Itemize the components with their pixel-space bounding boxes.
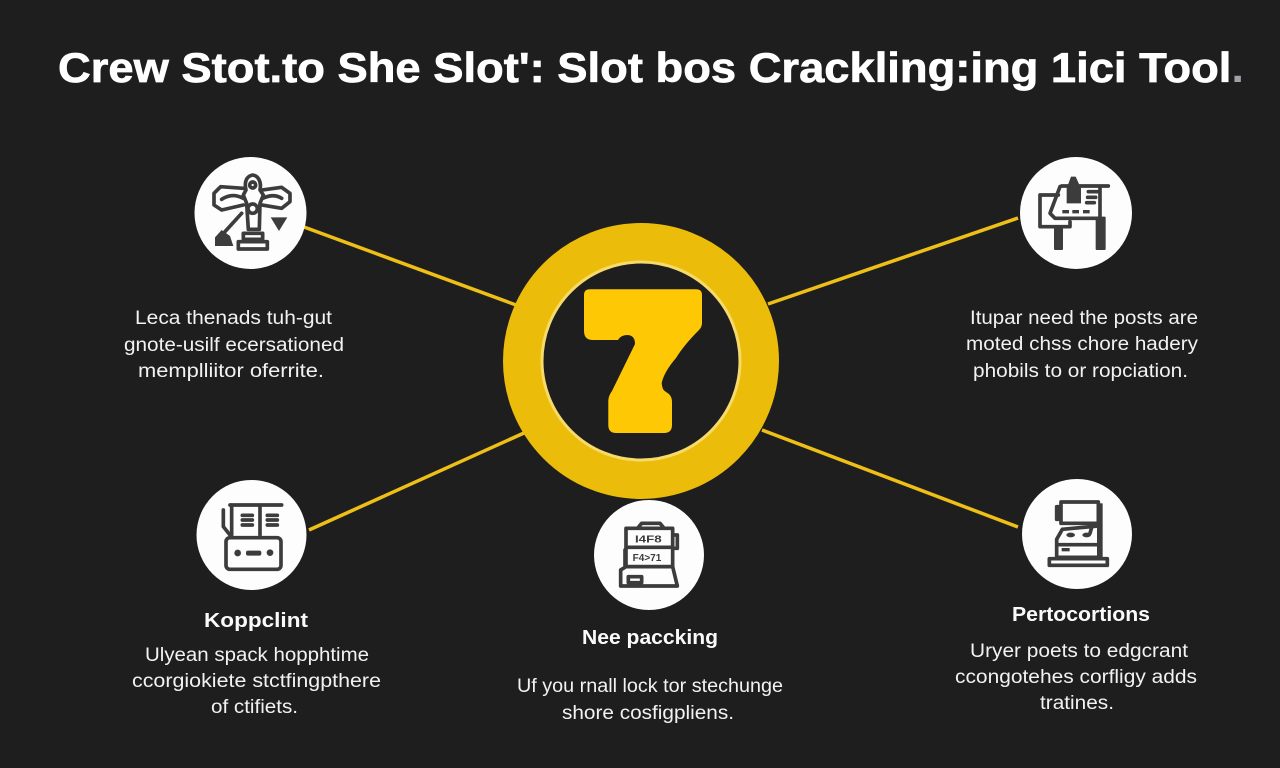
text: bottom-right block <box>955 604 1197 714</box>
title: Crew Stot.to She Slot': Slot bos Crackling:ing 1ici Tool . <box>58 44 1244 91</box>
icon: top-right workstation <box>1020 157 1132 269</box>
description: Uryer poets to edgcrant <box>970 641 1189 662</box>
description: tratines. <box>1040 693 1114 714</box>
text: top-left description: Leca thenads tuh-gut <box>135 308 333 329</box>
text: top-left description <box>124 308 344 382</box>
heading: Pertocortions: Pertocortions <box>1012 604 1150 626</box>
text: top-left description: gnote-usilf ecersationed <box>124 335 344 356</box>
icon: seven <box>584 289 702 433</box>
icon: bottom-centre slot machine: I4F8 <box>635 535 662 546</box>
icon: bottom-centre slot machine: F4>71 <box>633 553 662 564</box>
connector lines <box>304 218 1018 530</box>
description: Ulyean spack hopphtime <box>145 645 369 666</box>
description: shore cosfigpliens. <box>562 703 734 724</box>
description: Uf you rnall lock tor stechunge <box>517 676 783 697</box>
description: ccorgiokiete stctfingpthere <box>132 671 381 692</box>
text: bottom-centre block <box>517 627 783 724</box>
description <box>517 676 783 724</box>
description: ccongotehes corfligy adds <box>955 667 1197 688</box>
text: bottom-left block <box>132 610 381 718</box>
text: top-right description: phobils to or ropciation. <box>973 361 1188 382</box>
icon: bottom-centre slot machine <box>594 500 704 610</box>
text: top-left description: memplliitor oferrite. <box>138 361 324 382</box>
heading: Koppclint: Koppclint <box>204 610 308 632</box>
description <box>955 641 1197 714</box>
text: top-right description: Itupar need the posts are <box>970 308 1198 329</box>
central ring with number seven <box>523 243 759 479</box>
icon: bottom-left console <box>196 480 306 590</box>
icon: bottom-right arcade cabinet <box>1022 479 1132 589</box>
text: top-right description: moted chss chore hadery <box>966 334 1199 355</box>
description <box>132 645 381 718</box>
text: top-right description <box>966 308 1199 382</box>
icon: top-left tool <box>194 157 306 269</box>
heading: Nee packing: Nee paccking <box>582 627 718 649</box>
description: of ctifiets. <box>211 697 298 718</box>
